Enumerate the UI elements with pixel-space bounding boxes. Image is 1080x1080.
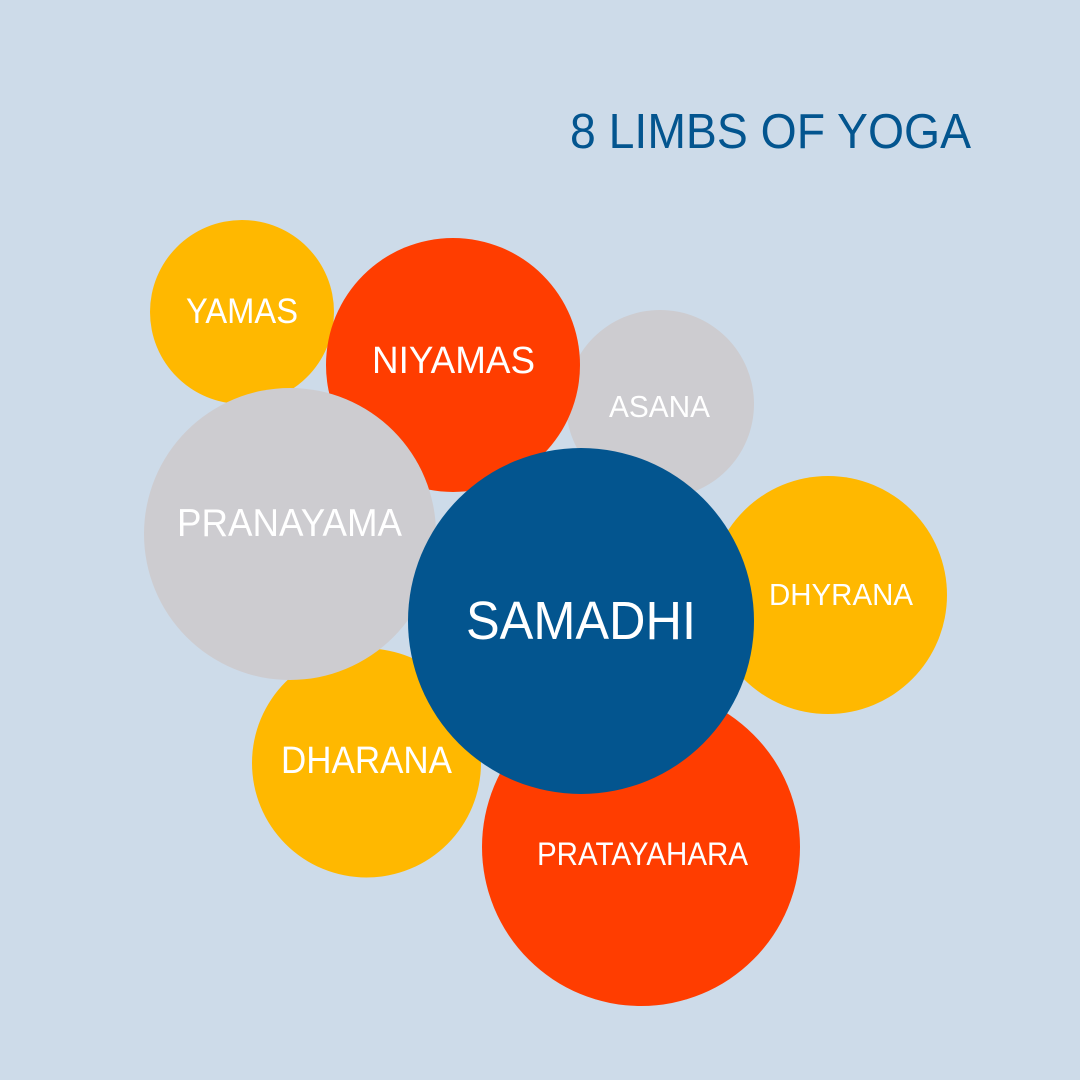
circle: Dhyrana: [709, 476, 947, 714]
circle: Asana: [566, 310, 754, 498]
circle: Dharana: [252, 648, 481, 878]
circle: Niyamas: [326, 238, 580, 492]
circle: Asana: ASANA: [609, 389, 710, 424]
circle: Yamas: YAMAS: [186, 292, 298, 331]
circle: Pranayama: [144, 388, 436, 680]
circle: Samadhi: [408, 448, 754, 794]
circle: Samadhi: SAMADHI: [466, 591, 696, 651]
circle: Yamas: [150, 220, 334, 404]
circle: Niyamas: NIYAMAS: [372, 340, 535, 382]
circle: Pratayahara: PRATAYAHARA: [537, 836, 749, 872]
circle: Dharana: DHARANA: [281, 740, 453, 782]
title: 8 LIMBS OF YOGA: [570, 105, 971, 159]
circle: Pranayama: PRANAYAMA: [177, 502, 402, 545]
circle: Pratayahara: [482, 688, 800, 1006]
circle: Dhyrana: DHYRANA: [769, 577, 913, 612]
